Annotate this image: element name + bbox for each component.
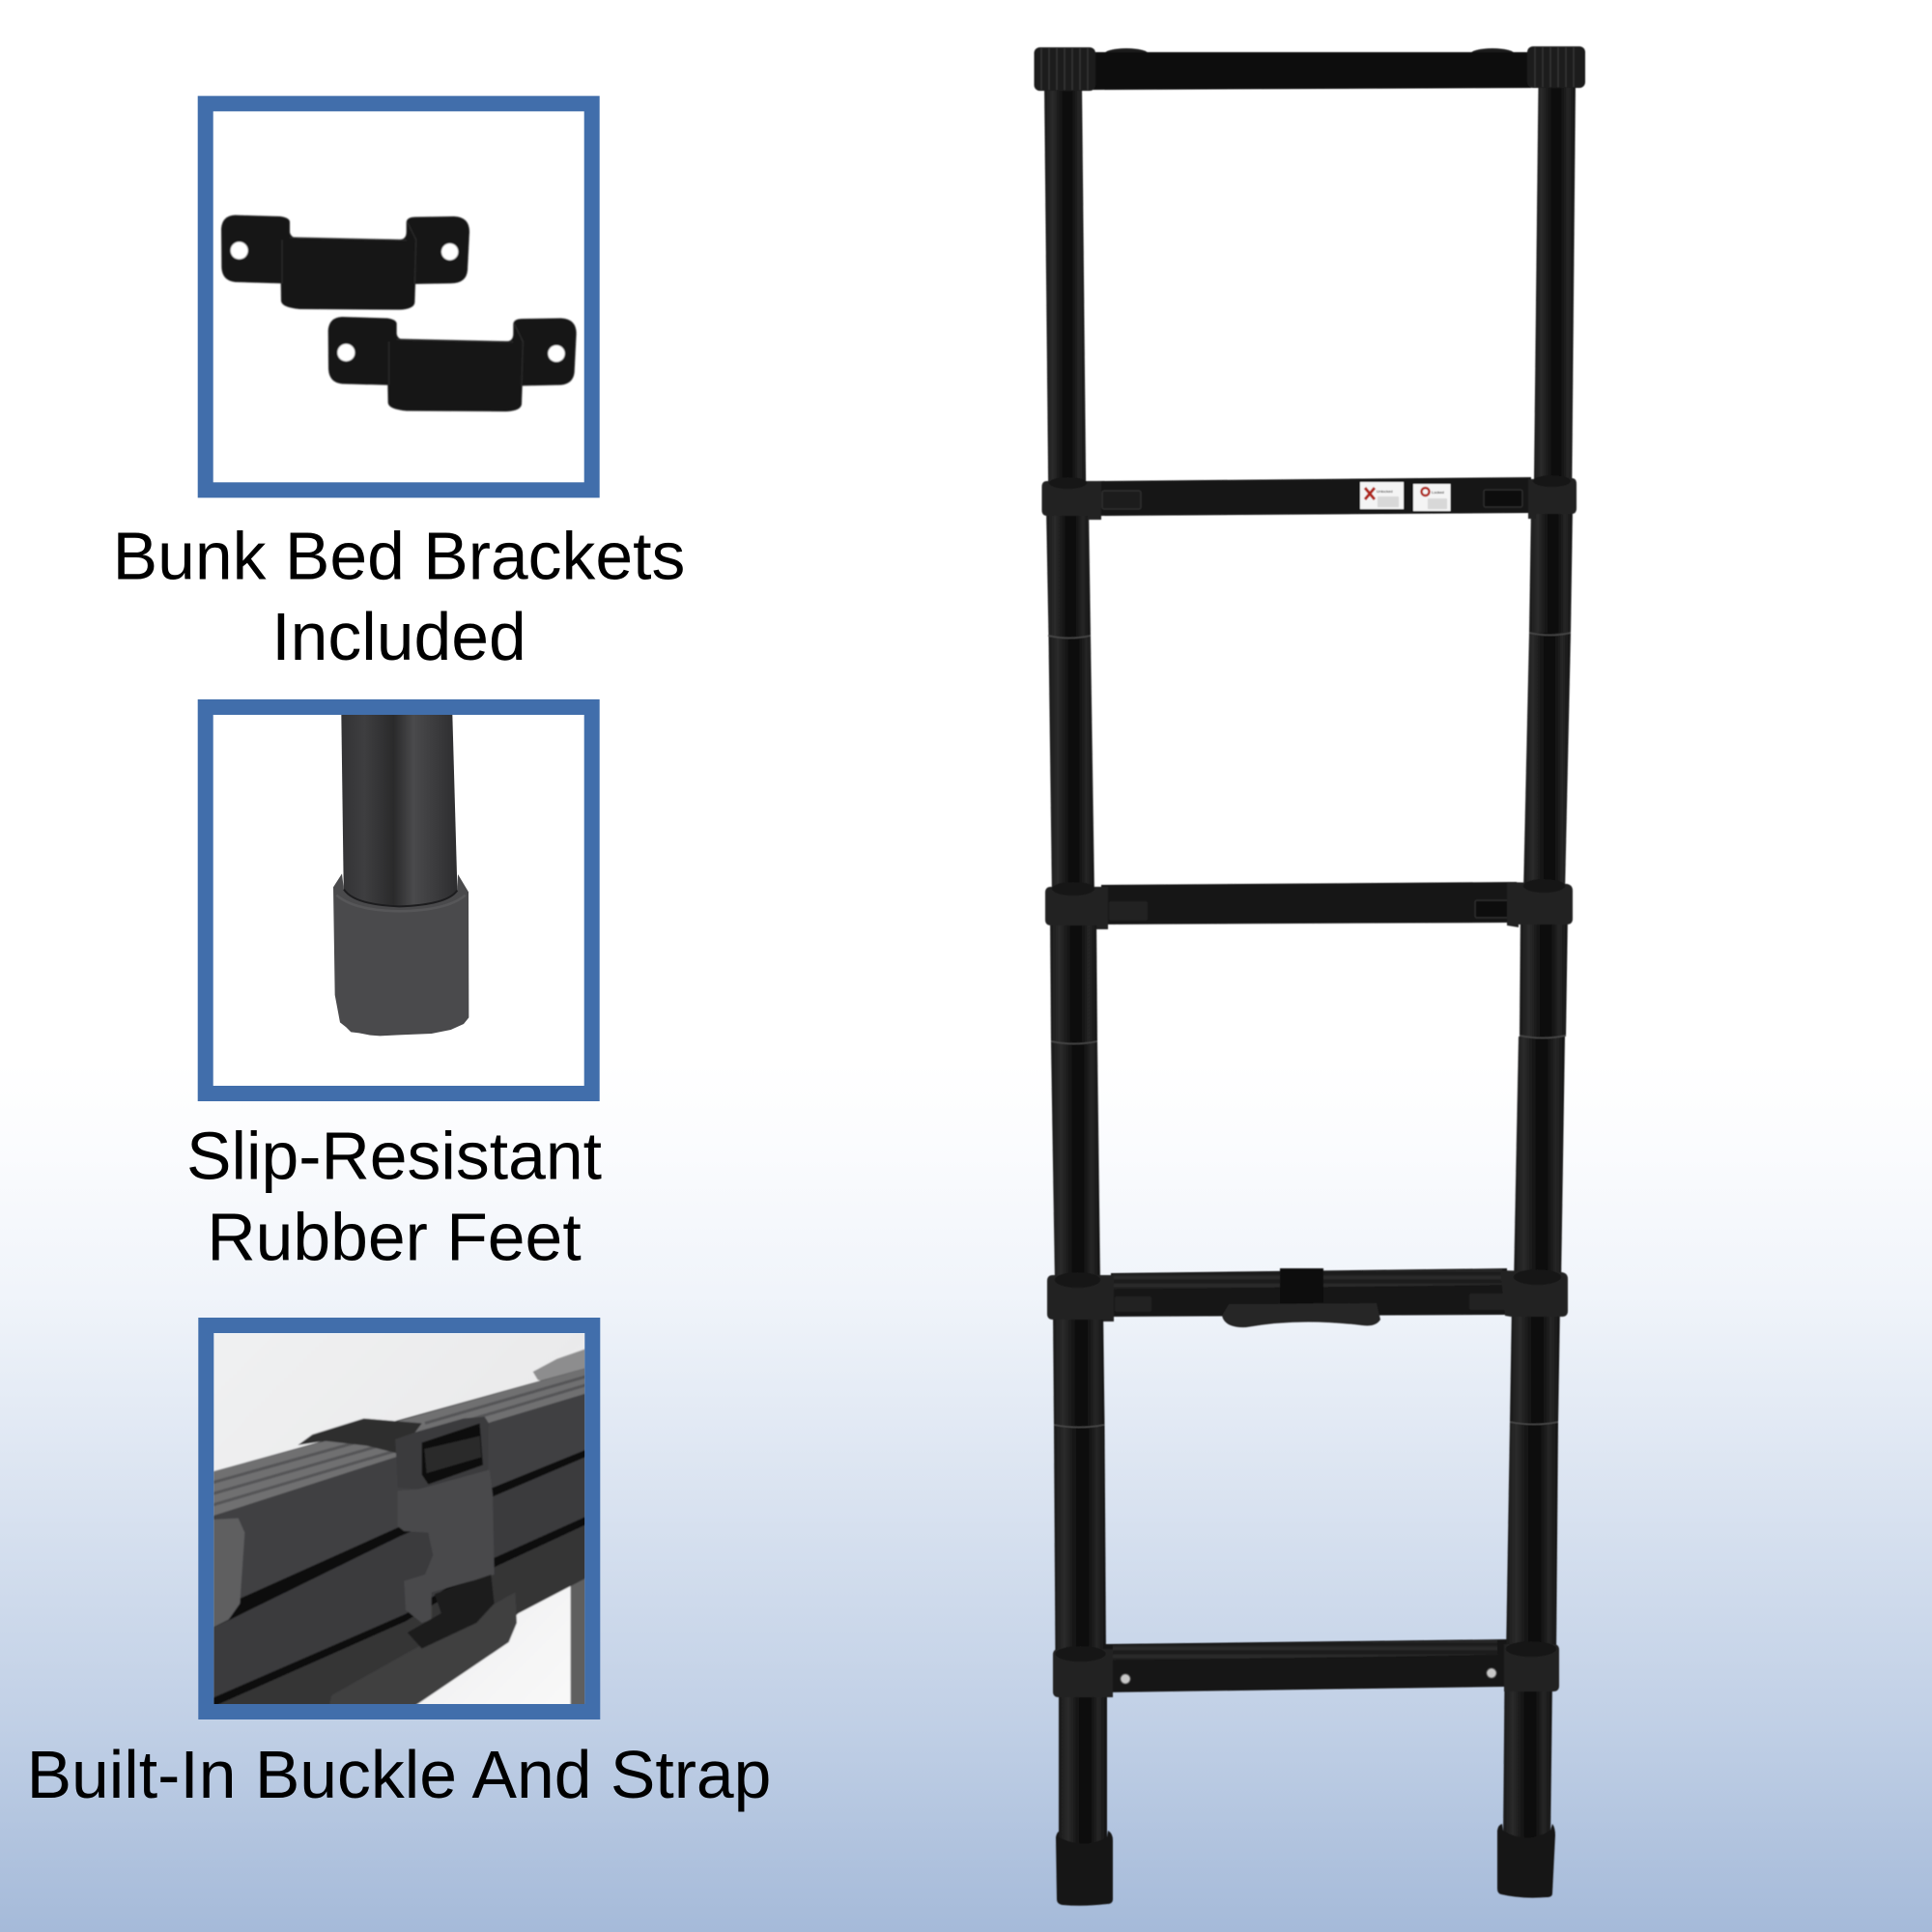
rung 5 with screws — [1104, 1639, 1507, 1692]
panel: bunk bed brackets — [206, 103, 592, 490]
left foot — [1056, 1831, 1113, 1906]
caption: bunk bed brackets: Included — [271, 599, 526, 674]
panel: buckle and strap — [206, 1325, 592, 1713]
screw right — [1487, 1668, 1496, 1678]
screw left — [1121, 1674, 1130, 1684]
panel frame: feet — [206, 707, 592, 1094]
sticker: unlocked — [1360, 482, 1404, 509]
velcro strap — [1280, 1268, 1323, 1305]
pole ends over collars — [1049, 475, 1571, 1662]
sticker: locked — [1413, 484, 1451, 511]
rung 4 with strap and handle — [1111, 1268, 1507, 1327]
right foot — [1497, 1824, 1555, 1898]
top caps — [1034, 46, 1585, 91]
panel frame: buckle — [206, 1325, 592, 1712]
right rail — [1503, 82, 1576, 1843]
caption: rubber feet: Slip-Resistant — [186, 1119, 602, 1194]
sticker: locked: Locked — [1432, 490, 1444, 495]
carry handle — [1222, 1303, 1380, 1327]
telescoping ladder — [1034, 46, 1585, 1906]
sticker: unlocked: Unlocked — [1377, 489, 1393, 494]
caption: bunk bed brackets: Bunk Bed Brackets — [113, 518, 685, 593]
feet — [1056, 1824, 1555, 1906]
rung collars — [1041, 478, 1577, 1697]
caption: rubber feet: Rubber Feet — [207, 1200, 582, 1275]
left rail — [1044, 82, 1107, 1850]
panel frame: brackets — [206, 103, 592, 490]
photo: two black brackets — [221, 215, 577, 412]
rung 1: top bar — [1092, 48, 1531, 90]
telescoping joint lines — [1048, 633, 1571, 1428]
rung 3 — [1101, 882, 1517, 924]
photo: rubber foot close-up — [333, 715, 469, 1036]
rung 2 with stickers — [1096, 477, 1531, 516]
caption: buckle and strap: Built-In Buckle And Strap — [27, 1737, 771, 1812]
photo: buckle and strap close-up — [206, 1326, 592, 1713]
panel: rubber feet — [206, 707, 592, 1094]
